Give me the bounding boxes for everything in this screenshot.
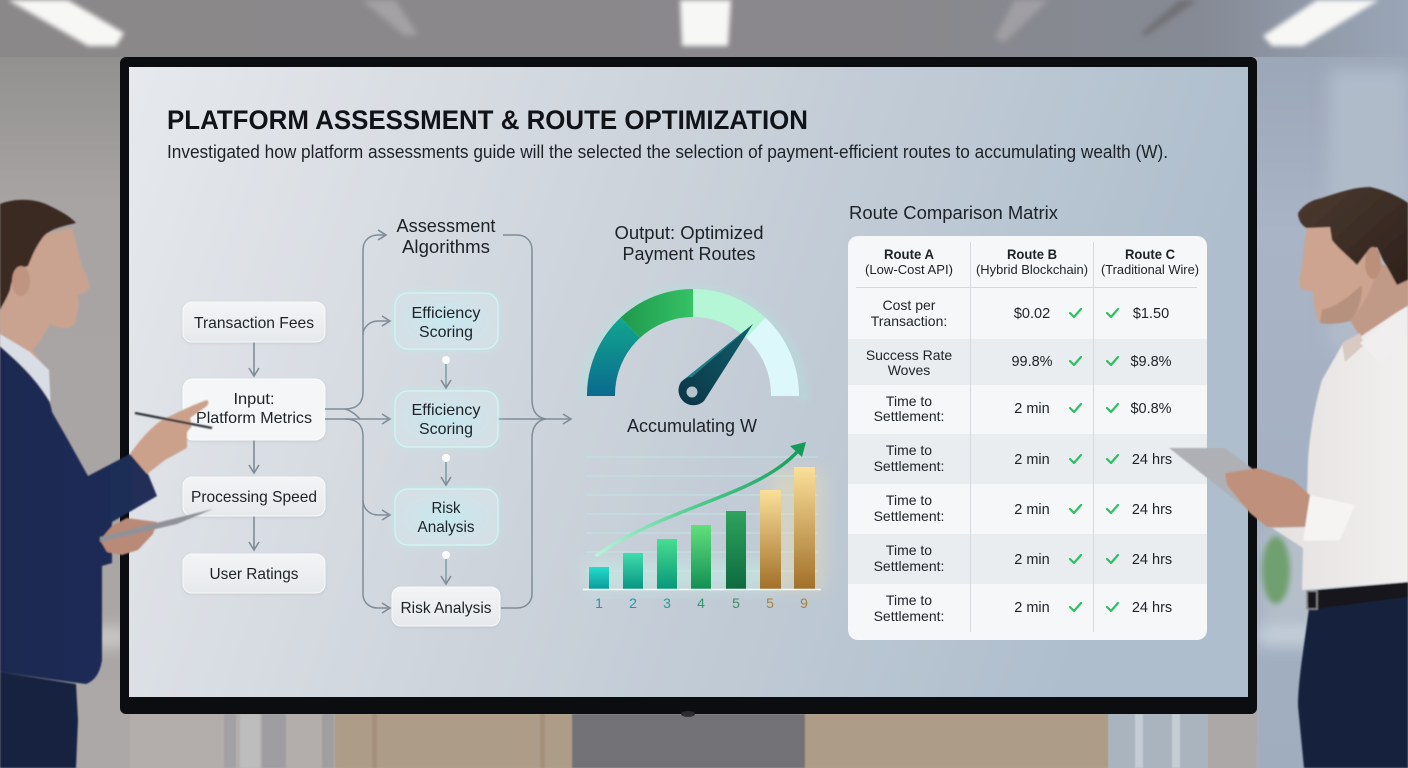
node: efficiency scoring 2 <box>395 391 498 447</box>
shirt collar <box>0 334 82 470</box>
node: risk analysis: Analysis <box>418 519 474 536</box>
heading: output optimized payment routes: Payment Routes <box>622 244 756 264</box>
heading: route comparison matrix: Route Comparison Matrix <box>849 203 1058 223</box>
table header: Route A <box>884 246 934 262</box>
box: user ratings: User Ratings <box>210 566 298 583</box>
box: input platform metrics: Platform Metrics <box>196 410 312 427</box>
bar axis labels: 3 <box>663 595 671 611</box>
person: woman presenter <box>0 200 213 768</box>
table row labels: Time to <box>886 592 932 608</box>
table values route c <box>1130 306 1172 616</box>
heading: output optimized payment routes: Output: Optimized <box>614 223 764 243</box>
shirt cuff <box>1303 495 1355 541</box>
gauge needle <box>679 324 753 405</box>
tablet <box>100 509 213 542</box>
pointing hand <box>130 400 208 474</box>
box: input platform metrics: Input: <box>234 391 274 408</box>
table row labels: Settlement: <box>874 408 944 424</box>
pen <box>135 413 212 428</box>
title: PLATFORM ASSESSMENT & ROUTE OPTIMIZATION <box>167 105 808 135</box>
bar axis labels: 5 <box>766 595 774 611</box>
panel: route comparison matrix <box>848 203 1207 640</box>
table values route b <box>1011 306 1053 616</box>
bar axis labels: 2 <box>629 595 637 611</box>
table values route c: 24 hrs <box>1132 552 1172 568</box>
panel: output <box>582 223 825 611</box>
icons: green check marks <box>1070 309 1118 611</box>
heading: assessment algorithms: Assessment <box>396 216 496 236</box>
node: efficiency scoring 2: Efficiency <box>412 402 480 419</box>
tablet <box>1169 448 1275 514</box>
table row labels: Time to <box>886 393 932 409</box>
bar axis labels: 5 <box>732 595 740 611</box>
table header: Route B <box>1007 246 1057 262</box>
table row labels: Cost per <box>883 297 936 313</box>
bar axis labels: 9 <box>800 595 808 611</box>
bar chart <box>583 442 825 611</box>
box: input platform metrics <box>183 379 325 440</box>
table values route c: $9.8% <box>1130 354 1172 370</box>
node: efficiency scoring 1 <box>395 293 498 349</box>
heading: assessment algorithms: Algorithms <box>402 237 490 257</box>
panel: input metrics <box>183 302 325 593</box>
table row labels: Time to <box>886 442 932 458</box>
table row labels: Transaction: <box>871 313 947 329</box>
table values route b: 2 min <box>1014 401 1050 417</box>
belt <box>1307 582 1408 610</box>
table values route c: 24 hrs <box>1132 452 1172 468</box>
neck <box>1350 262 1408 337</box>
growth arrow <box>597 442 806 555</box>
table row labels: Settlement: <box>874 508 944 524</box>
table row labels: Time to <box>886 492 932 508</box>
table header <box>865 246 1199 277</box>
ear <box>1365 247 1381 279</box>
table row labels: Settlement: <box>874 608 944 624</box>
table row labels: Woves <box>888 362 930 378</box>
table values route b: 2 min <box>1014 452 1050 468</box>
heading: assessment algorithms <box>396 216 496 257</box>
table values route c: 24 hrs <box>1132 600 1172 616</box>
subtitle: Investigated how platform assessments guide will the selected the selection of payment-efficient routes to accumulating wealth (W). <box>167 142 1168 162</box>
node: risk analysis box: Risk Analysis <box>400 600 492 617</box>
neck and face <box>0 228 89 372</box>
table row labels: Settlement: <box>874 458 944 474</box>
table <box>848 236 1207 640</box>
face <box>1299 226 1376 324</box>
box: processing speed: Processing Speed <box>191 489 317 506</box>
node: risk analysis box <box>392 587 500 626</box>
table values route b: 99.8% <box>1011 354 1053 370</box>
node: efficiency scoring 1: Scoring <box>419 324 473 341</box>
node: risk analysis <box>395 489 498 545</box>
table values route b: 2 min <box>1014 502 1050 518</box>
arrows between inputs <box>253 342 255 550</box>
connectors: inputs to algorithms <box>325 235 571 608</box>
table row labels <box>866 297 952 624</box>
table values route c: $1.50 <box>1133 306 1169 322</box>
monitor indicator <box>681 711 695 717</box>
table header: (Low-Cost API) <box>865 262 953 277</box>
monitor screen <box>129 67 1248 697</box>
label: accumulating w: Accumulating W <box>627 416 757 436</box>
table row labels: Settlement: <box>874 558 944 574</box>
table header: (Traditional Wire) <box>1101 262 1199 277</box>
bar axis labels: 1 <box>595 595 603 611</box>
box: transaction fees: Transaction Fees <box>194 315 314 332</box>
table row labels: Success Rate <box>866 347 952 363</box>
table values route b: $0.02 <box>1014 306 1050 322</box>
table values route b: 2 min <box>1014 552 1050 568</box>
ceiling lights <box>8 0 1379 46</box>
node: efficiency scoring 2: Scoring <box>419 421 473 438</box>
gauge <box>582 289 804 405</box>
box: processing speed <box>183 477 325 516</box>
hand holding tablet <box>1225 468 1310 527</box>
table values route c: 24 hrs <box>1132 502 1172 518</box>
shirt <box>1272 306 1408 590</box>
table values route c: $0.8% <box>1130 401 1172 417</box>
node: efficiency scoring 1: Efficiency <box>412 305 480 322</box>
hair <box>1298 187 1408 285</box>
lower hand <box>100 518 157 555</box>
table header: (Hybrid Blockchain) <box>976 262 1088 277</box>
flow arrows with dots <box>442 356 450 584</box>
bar axis labels: 4 <box>697 595 705 611</box>
trousers <box>1298 596 1408 768</box>
beard shadow <box>1320 285 1362 324</box>
box: user ratings <box>183 554 325 593</box>
person: man presenter <box>1169 187 1408 768</box>
box: transaction fees <box>183 302 325 342</box>
monitor frame <box>120 57 1257 714</box>
table header: Route C <box>1125 246 1175 262</box>
table row labels: Time to <box>886 542 932 558</box>
collar <box>1342 333 1364 362</box>
trousers <box>0 672 78 768</box>
table values route b: 2 min <box>1014 600 1050 616</box>
bar axis labels <box>595 595 808 611</box>
node: risk analysis: Risk <box>432 500 461 517</box>
hair <box>0 200 76 310</box>
ear <box>12 266 30 296</box>
panel: assessment algorithms <box>392 216 500 626</box>
heading: output optimized payment routes <box>614 223 764 264</box>
jacket <box>0 346 157 684</box>
